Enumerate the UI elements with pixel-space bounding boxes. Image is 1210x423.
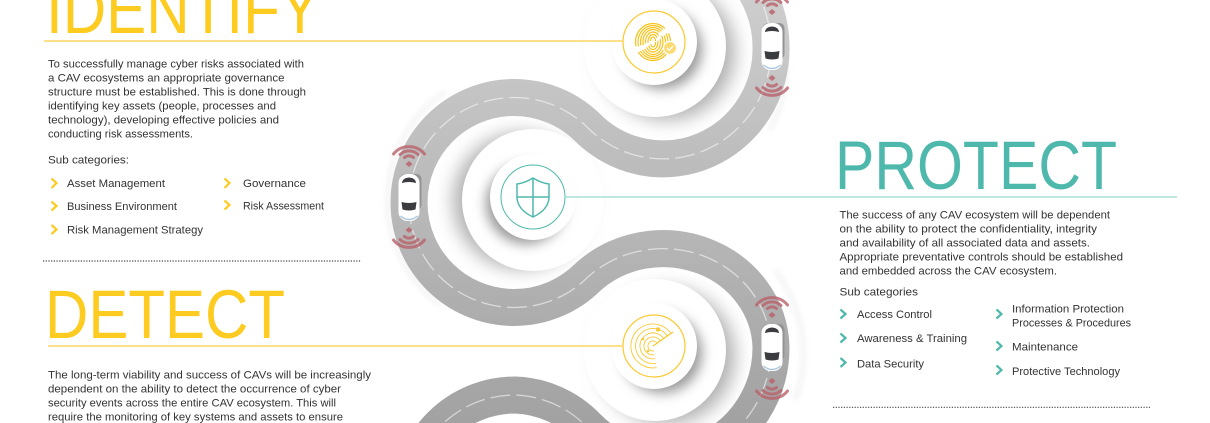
- subheading: protect sub categories: Sub categories: [840, 287, 918, 299]
- protect icon disc: [490, 154, 576, 240]
- car top right with sensors: [756, 0, 788, 95]
- list: protect sub categories: Data Security: [857, 359, 924, 371]
- text block: detect: security events across the entire CAV ecosystem. This will: [48, 398, 336, 410]
- identify icon disc: [611, 0, 697, 85]
- text block: detect: [48, 370, 371, 423]
- ring shadows: protect: [453, 129, 604, 271]
- title: detect: DETECT: [45, 276, 285, 353]
- title: protect: PROTECT: [835, 127, 1117, 204]
- connector line: detect: [48, 345, 623, 347]
- list: identify sub categories: Business Environment: [67, 201, 178, 213]
- text block: protect: on the ability to protect the confidentiality, integrity: [840, 224, 1097, 236]
- list: protect sub categories: Protective Technology: [1012, 366, 1120, 378]
- text block: identify: [48, 58, 306, 140]
- list: identify sub categories: Risk Assessment: [243, 200, 325, 212]
- list: protect sub categories: Access Control: [857, 309, 932, 321]
- connector line: protect: [565, 196, 1177, 198]
- ring shadows: identify: [584, 0, 735, 120]
- detect icon disc: [611, 303, 697, 389]
- text block: identify: identifying key assets (people, processes and: [48, 100, 276, 112]
- text block: protect: The success of any CAV ecosystem will be dependent: [840, 209, 1111, 221]
- list: protect sub categories: Processes & Procedures: [1012, 318, 1131, 330]
- text block: protect: and availability of all associated data and assets.: [840, 238, 1090, 250]
- text block: protect: and embedded across the CAV ecosystem.: [840, 266, 1057, 278]
- text block: identify: conducting risk assessments.: [48, 128, 193, 140]
- text block: protect: Appropriate preventative controls should be established: [840, 252, 1123, 264]
- icon: radar: [631, 324, 673, 368]
- text block: identify: structure must be established. This is done through: [48, 86, 306, 98]
- connector line: identify: [44, 40, 623, 42]
- text block: identify: technology), developing effective policies and: [48, 114, 279, 126]
- text block: identify: To successfully manage cyber risks associated with: [48, 58, 304, 70]
- text block: protect: [840, 209, 1123, 278]
- list: protect sub categories: Awareness & Training: [857, 333, 967, 345]
- icon: fingerprint: [636, 24, 676, 60]
- subheading: identify sub categories: Sub categories:: [48, 154, 129, 166]
- list: identify sub categories: [52, 178, 325, 236]
- text block: detect: dependent on the ability to detect the occurrence of cyber: [48, 384, 341, 396]
- ring shadows: detect: [584, 279, 735, 423]
- list: protect sub categories: [840, 304, 1131, 378]
- road outer shadows: [388, 0, 803, 400]
- winding road: [409, 0, 771, 423]
- car lower right with sensors: [756, 298, 788, 398]
- list: identify sub categories: Risk Management Strategy: [67, 224, 203, 236]
- text block: identify: a CAV ecosystems an appropriate governance: [48, 72, 284, 84]
- list: identify sub categories: Governance: [243, 178, 306, 190]
- list: identify sub categories: Asset Management: [67, 178, 166, 190]
- list: protect sub categories: Maintenance: [1012, 342, 1078, 354]
- list: protect sub categories: Information Protection: [1012, 304, 1124, 316]
- car middle left with sensors: [394, 147, 424, 247]
- icon: shield: [517, 178, 549, 217]
- text block: detect: The long-term viability and success of CAVs will be increasingly: [48, 370, 371, 382]
